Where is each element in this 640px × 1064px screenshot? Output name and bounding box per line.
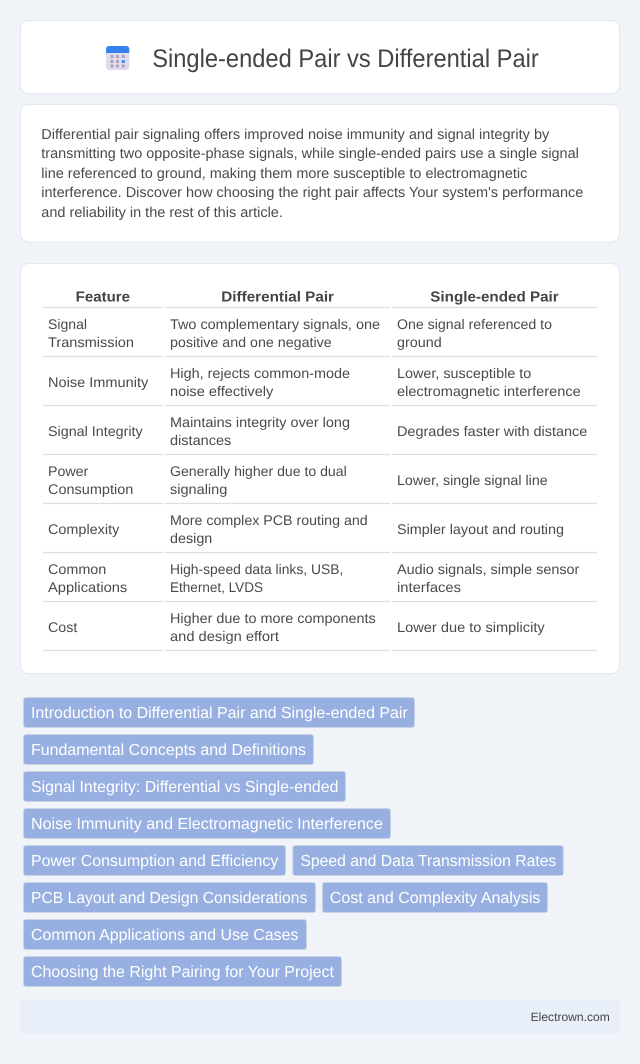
row: power consumption: signaling bbox=[170, 481, 227, 497]
icon: calendar bbox=[106, 46, 129, 70]
tag: common applications bbox=[24, 920, 306, 950]
intro paragraph: transmitting two opposite-phase signals, while single-ended pairs use a single signal bbox=[41, 146, 579, 162]
row: signal integrity: Degrades faster with distance bbox=[397, 423, 588, 439]
row: common applications: Ethernet, LVDS bbox=[170, 579, 263, 595]
row: signal integrity: distances bbox=[170, 432, 231, 448]
tag: speed and data rates: Speed and Data Transmission Rates bbox=[300, 853, 556, 870]
row: complexity: Simpler layout and routing bbox=[397, 521, 564, 537]
row: signal transmission: One signal referenced to bbox=[397, 316, 552, 332]
row: noise immunity: electromagnetic interference bbox=[397, 383, 581, 399]
row: noise immunity: Lower, susceptible to bbox=[397, 365, 532, 381]
row: noise immunity: Noise Immunity bbox=[48, 374, 148, 390]
row: common applications: Applications bbox=[48, 579, 127, 595]
table header row: Single-ended Pair bbox=[430, 290, 559, 306]
tag: introduction bbox=[24, 698, 414, 728]
footer: Electrown.com bbox=[531, 1010, 610, 1024]
tag: noise immunity bbox=[24, 808, 390, 838]
table header row: Feature bbox=[76, 290, 130, 306]
row: noise immunity: High, rejects common-mode bbox=[170, 365, 350, 381]
row: complexity: design bbox=[170, 530, 212, 546]
footer bbox=[20, 1000, 620, 1034]
row: signal transmission: ground bbox=[397, 334, 442, 350]
tag: fundamental concepts: Fundamental Concepts and Definitions bbox=[31, 742, 306, 759]
row: signal integrity bbox=[48, 414, 588, 448]
tag: power consumption: Power Consumption and Efficiency bbox=[31, 853, 278, 870]
intro paragraph: Differential pair signaling offers improved noise immunity and signal integrity by bbox=[41, 127, 550, 143]
table header row: Differential Pair bbox=[221, 290, 334, 306]
tag: cost and complexity bbox=[322, 882, 548, 912]
row: power consumption: Consumption bbox=[48, 481, 133, 497]
row: power consumption: Power bbox=[48, 463, 89, 479]
row: common applications bbox=[48, 561, 580, 595]
row: cost: and design effort bbox=[170, 628, 279, 644]
row: signal transmission: positive and one negative bbox=[170, 334, 332, 350]
row: power consumption bbox=[48, 463, 548, 497]
tag: introduction: Introduction to Differential Pair and Single-ended Pair bbox=[31, 705, 408, 722]
row: power consumption: Lower, single signal line bbox=[397, 472, 548, 488]
panel: comparison table bbox=[20, 264, 620, 674]
tag: signal integrity: Signal Integrity: Differential vs Single-ended bbox=[31, 779, 338, 796]
panel: introduction bbox=[20, 104, 620, 242]
row: cost: Higher due to more components bbox=[170, 610, 376, 626]
tag: cost and complexity: Cost and Complexity Analysis bbox=[330, 890, 540, 907]
row: cost: Lower due to simplicity bbox=[397, 619, 545, 635]
tag: fundamental concepts bbox=[24, 734, 314, 764]
tag: speed and data rates bbox=[293, 846, 563, 876]
tag: PCB layout: PCB Layout and Design Considerations bbox=[31, 890, 307, 907]
tag: signal integrity bbox=[24, 772, 346, 802]
row: signal transmission: Transmission bbox=[48, 334, 134, 350]
row: power consumption: Generally higher due to dual bbox=[170, 463, 347, 479]
row: common applications: High-speed data links, USB, bbox=[170, 561, 343, 577]
row: signal integrity: Maintains integrity over long bbox=[170, 414, 350, 430]
panel: header bbox=[20, 20, 620, 94]
title: Single-ended Pair vs Differential Pair bbox=[152, 45, 539, 73]
intro paragraph: interference. Discover how choosing the right pair affects Your system's performance bbox=[41, 185, 583, 201]
intro paragraph: and reliability in the rest of this article. bbox=[41, 205, 283, 221]
row: signal integrity: Signal Integrity bbox=[48, 423, 143, 439]
topic tags bbox=[24, 698, 563, 986]
table header row bbox=[76, 290, 559, 306]
intro paragraph: line referenced to ground, making them more susceptible to electromagnetic bbox=[41, 166, 527, 182]
row: complexity bbox=[48, 512, 564, 546]
row: cost: Cost bbox=[48, 619, 77, 635]
row: signal transmission: Two complementary signals, one bbox=[170, 316, 380, 332]
row: complexity: More complex PCB routing and bbox=[170, 512, 368, 528]
row: cost bbox=[48, 610, 545, 644]
row: common applications: interfaces bbox=[397, 579, 461, 595]
row: noise immunity: noise effectively bbox=[170, 383, 273, 399]
tag: choosing the right pairing bbox=[24, 956, 342, 986]
row: complexity: Complexity bbox=[48, 521, 119, 537]
row: common applications: Common bbox=[48, 561, 106, 577]
tag: common applications: Common Applications and Use Cases bbox=[31, 927, 298, 944]
tag: noise immunity: Noise Immunity and Electromagnetic Interference bbox=[31, 816, 383, 833]
tag: choosing the right pairing: Choosing the Right Pairing for Your Project bbox=[31, 964, 334, 981]
row: common applications: Audio signals, simple sensor bbox=[397, 561, 580, 577]
tag: PCB layout bbox=[24, 882, 316, 912]
row: noise immunity bbox=[48, 365, 581, 399]
tag: power consumption bbox=[24, 846, 286, 876]
intro paragraph bbox=[41, 127, 583, 221]
row: signal transmission: Signal bbox=[48, 316, 87, 332]
row: signal transmission bbox=[48, 316, 552, 350]
